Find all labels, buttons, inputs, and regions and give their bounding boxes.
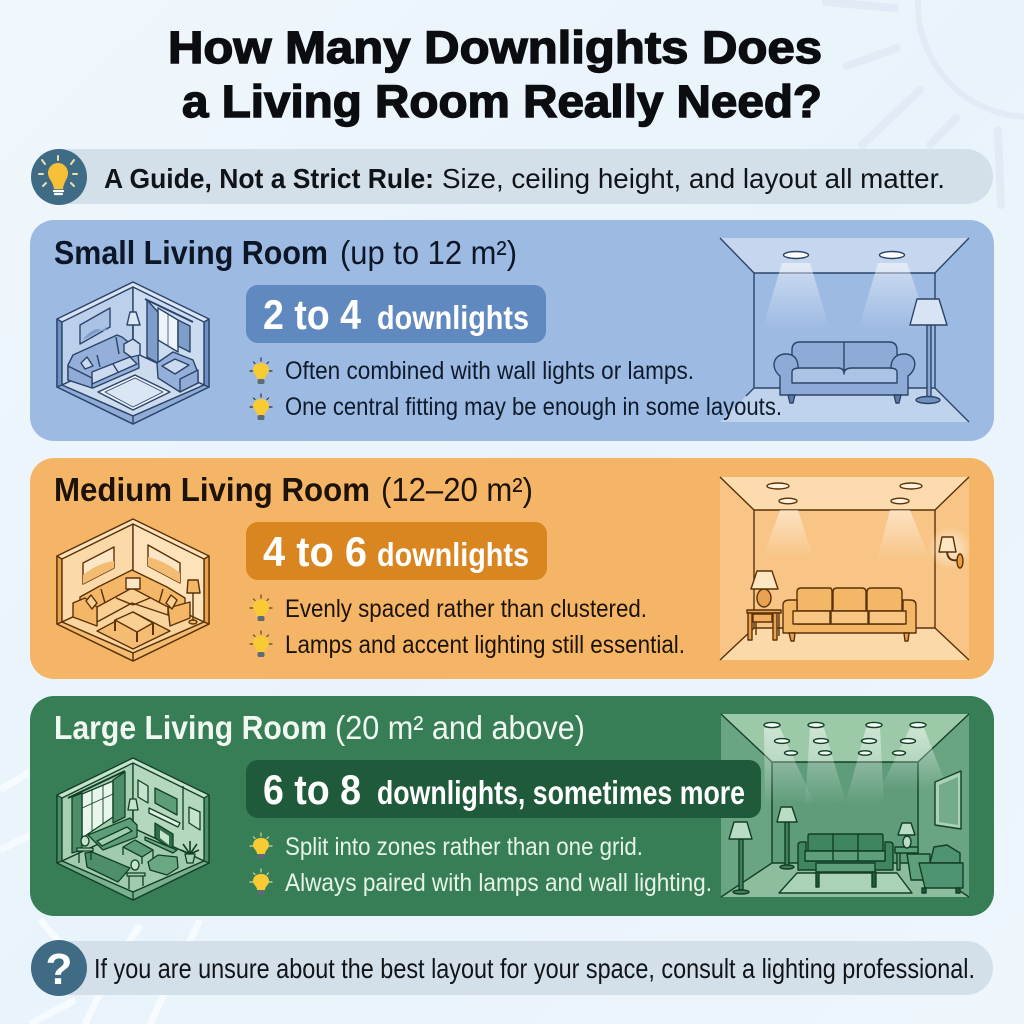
banner text: Size, ceiling height, and layout all matter. bbox=[442, 163, 945, 194]
panel: large living room bbox=[30, 696, 994, 916]
title bbox=[168, 22, 822, 127]
bullet list: large: Split into zones rather than one grid. bbox=[285, 833, 643, 861]
icon: question mark bbox=[31, 940, 87, 996]
panel: small living room bbox=[30, 220, 994, 441]
bullet list: small bbox=[250, 357, 782, 421]
heading: large: (20 m² and above) bbox=[335, 709, 585, 746]
bullet list: large bbox=[250, 833, 712, 897]
count badge: medium bbox=[246, 522, 547, 580]
bullet list: small: Often combined with wall lights or lamps. bbox=[285, 357, 694, 385]
count badge: small: downlights bbox=[377, 299, 529, 336]
count badge: large bbox=[246, 760, 761, 818]
bullet list: large: Always paired with lamps and wall lighting. bbox=[285, 869, 712, 897]
decorative light rays lower left bbox=[0, 760, 200, 1024]
count badge: medium: downlights bbox=[377, 536, 529, 573]
isometric room: large bbox=[57, 758, 209, 900]
bullet list: small: One central fitting may be enough in some layouts. bbox=[285, 393, 782, 421]
title: a Living Room Really Need? bbox=[182, 76, 822, 127]
icon: light bulb bbox=[31, 149, 87, 205]
banner: guide note bbox=[31, 149, 993, 205]
count badge: large: downlights, sometimes more bbox=[377, 774, 745, 811]
footer banner bbox=[31, 940, 993, 996]
count badge: large: 6 to 8 bbox=[263, 766, 361, 813]
title: How Many Downlights Does bbox=[168, 22, 822, 73]
count badge: small: 2 to 4 bbox=[263, 291, 362, 338]
bullet list: medium: Evenly spaced rather than clustered. bbox=[285, 595, 647, 623]
count badge: medium: 4 to 6 bbox=[263, 528, 367, 575]
room scene: small bbox=[720, 238, 969, 422]
icon: question mark: ? bbox=[46, 945, 72, 994]
bullet list: medium bbox=[250, 595, 685, 659]
panel: medium living room bbox=[30, 458, 994, 679]
isometric room: small bbox=[57, 282, 209, 429]
room scene: medium bbox=[720, 477, 972, 660]
count badge: small bbox=[246, 285, 546, 343]
heading: medium: (12–20 m²) bbox=[381, 471, 533, 508]
heading: large: Large Living Room bbox=[54, 709, 327, 746]
heading: medium: Medium Living Room bbox=[54, 471, 370, 508]
isometric room: medium bbox=[57, 519, 209, 661]
room scene: large bbox=[721, 714, 969, 897]
heading: small: Small Living Room bbox=[54, 234, 328, 271]
banner text: A Guide, Not a Strict Rule: bbox=[104, 163, 434, 194]
bullet list: medium: Lamps and accent lighting still essential. bbox=[285, 631, 685, 659]
heading: small: (up to 12 m²) bbox=[340, 234, 517, 271]
decorative sun bbox=[826, 0, 1024, 205]
